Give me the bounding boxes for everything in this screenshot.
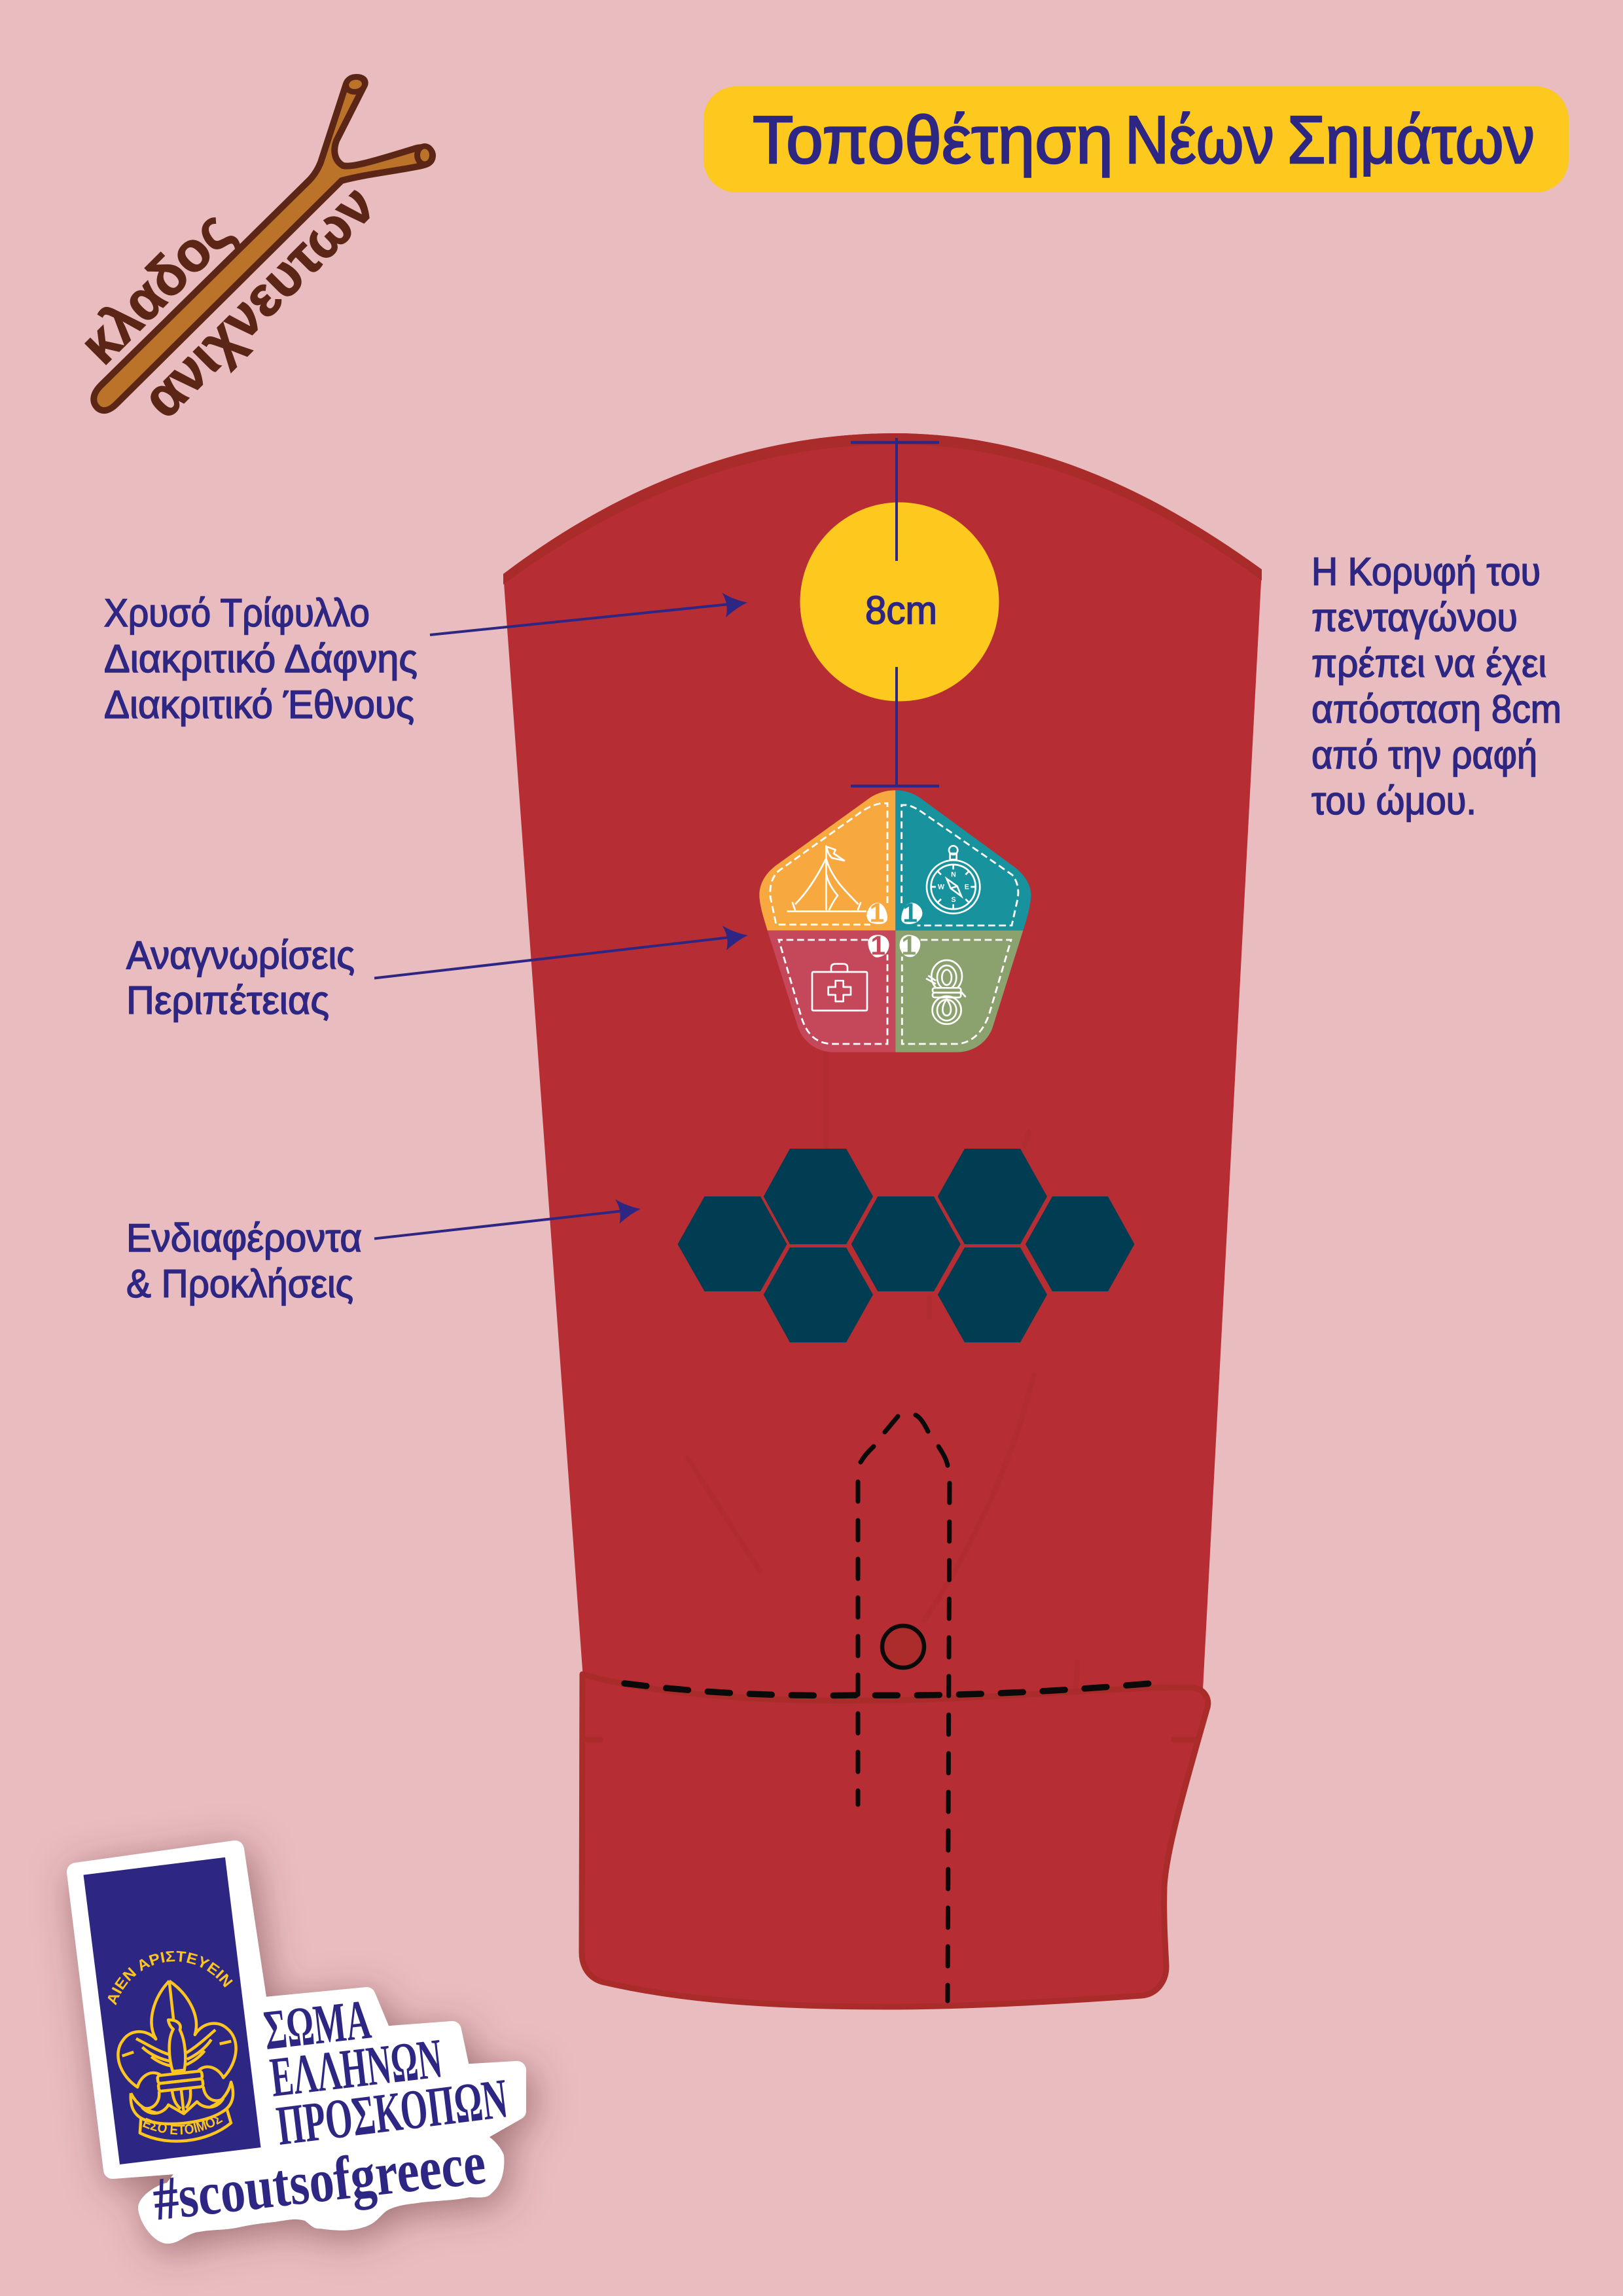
note: pentagon apex distance: πενταγώνου bbox=[1311, 596, 1518, 639]
sleeve garment bbox=[503, 433, 1262, 2007]
label: gold trefoil: Διακριτικό Δάφνης bbox=[104, 637, 418, 681]
icon: compass: S bbox=[951, 896, 956, 904]
label: interests and challenges bbox=[126, 1216, 362, 1306]
cuff bbox=[582, 1674, 1208, 2007]
label: gold trefoil: Διακριτικό Έθνους bbox=[104, 683, 414, 726]
note: pentagon apex distance: Η Κορυφή του bbox=[1311, 550, 1541, 594]
shoulder seam band bbox=[503, 433, 1262, 584]
level markers 1 bbox=[866, 897, 922, 960]
quadrant: tent bbox=[759, 790, 895, 931]
yellow circle badge with 8cm: 8cm bbox=[865, 588, 937, 632]
level markers 1: 1 bbox=[902, 897, 918, 927]
quadrant: compass bbox=[895, 790, 1031, 931]
note: pentagon apex distance: πρέπει να έχει bbox=[1311, 641, 1546, 685]
measurement line 8cm bbox=[851, 438, 939, 786]
scouts of greece sticker logo bbox=[52, 1829, 543, 2269]
scroll banner bbox=[130, 2082, 238, 2146]
icon: rope bbox=[926, 960, 966, 1024]
label: adventure recognitions: Περιπέτειας bbox=[126, 978, 329, 1022]
icon: first aid kit bbox=[812, 964, 867, 1011]
label: gold trefoil bbox=[104, 591, 418, 726]
fleur de lis bbox=[111, 1975, 240, 2089]
title pill: Σημάτων bbox=[1287, 102, 1535, 177]
label: adventure recognitions: Αναγνωρίσεις bbox=[126, 933, 355, 977]
note: pentagon apex distance: απόσταση 8cm bbox=[1311, 687, 1561, 731]
hexagon patches bbox=[678, 1149, 1135, 1342]
quadrant: first aid bbox=[768, 931, 895, 1052]
level markers 1: 1 bbox=[870, 897, 884, 927]
arrow to circle bbox=[430, 590, 749, 635]
button bbox=[882, 1626, 924, 1668]
phoenix bbox=[166, 2018, 187, 2072]
note: pentagon apex distance bbox=[1311, 550, 1561, 823]
label: gold trefoil: Χρυσό Τρίφυλλο bbox=[104, 591, 370, 635]
icon: forked stick bbox=[94, 73, 435, 410]
note: pentagon apex distance: του ώμου. bbox=[1311, 779, 1476, 823]
arrow to pentagon bbox=[374, 923, 749, 978]
icon: tent bbox=[787, 846, 866, 911]
blue crest panel bbox=[84, 1857, 260, 2164]
icon: compass bbox=[927, 846, 980, 914]
level markers 1: 1 bbox=[901, 930, 916, 960]
label: interests and challenges: & Προκλήσεις bbox=[126, 1262, 353, 1306]
title pill: Νέων bbox=[1125, 102, 1274, 177]
note: pentagon apex distance: από την ραφή bbox=[1311, 733, 1537, 777]
label: adventure recognitions bbox=[126, 933, 355, 1022]
wordmark bbox=[261, 1988, 511, 2157]
text: κλαδος: κλαδος bbox=[68, 199, 245, 376]
motto top: ΑΙΕΝ ΑΡΙΣΤΕΥΕΙΝ bbox=[107, 1950, 233, 2005]
scout crest bbox=[107, 1950, 238, 2143]
icon: compass: W bbox=[938, 883, 945, 891]
title pill: Τοποθέτηση bbox=[753, 102, 1113, 177]
hashtag: #scoutsofgreece bbox=[150, 2128, 489, 2234]
label: interests and challenges: Ενδιαφέροντα bbox=[126, 1216, 362, 1260]
title pill bbox=[704, 86, 1569, 192]
wordmark: ΣΩΜΑ bbox=[261, 1988, 374, 2062]
pentagon badge bbox=[759, 790, 1031, 1052]
branch logo: κλαδος ανιχνευτων bbox=[68, 73, 435, 429]
motto bottom: ΕΣΟ ΕΤΟΙΜΟΣ bbox=[143, 2117, 223, 2135]
stitched cuff line bbox=[624, 1683, 1151, 1695]
arrow to hexagons bbox=[374, 1196, 642, 1238]
fabric fold lines bbox=[688, 1054, 1091, 1946]
yellow circle badge with 8cm bbox=[800, 503, 999, 702]
wordmark: ΕΛΛΗΝΩΝ bbox=[267, 2026, 445, 2109]
cuff tick marks bbox=[584, 1737, 1198, 1742]
level markers 1: 1 bbox=[870, 930, 885, 960]
text: ανιχνευτων: ανιχνευτων bbox=[131, 173, 387, 429]
quadrant: rope bbox=[895, 931, 1023, 1052]
icon: compass: E bbox=[965, 884, 969, 891]
sleeve body bbox=[503, 433, 1262, 1715]
wordmark: ΠΡΟΣΚΟΠΩΝ bbox=[274, 2066, 511, 2157]
sticker white backing bbox=[76, 1850, 517, 2244]
icon: compass: N bbox=[951, 870, 956, 878]
stitched placket bbox=[858, 1415, 950, 2001]
